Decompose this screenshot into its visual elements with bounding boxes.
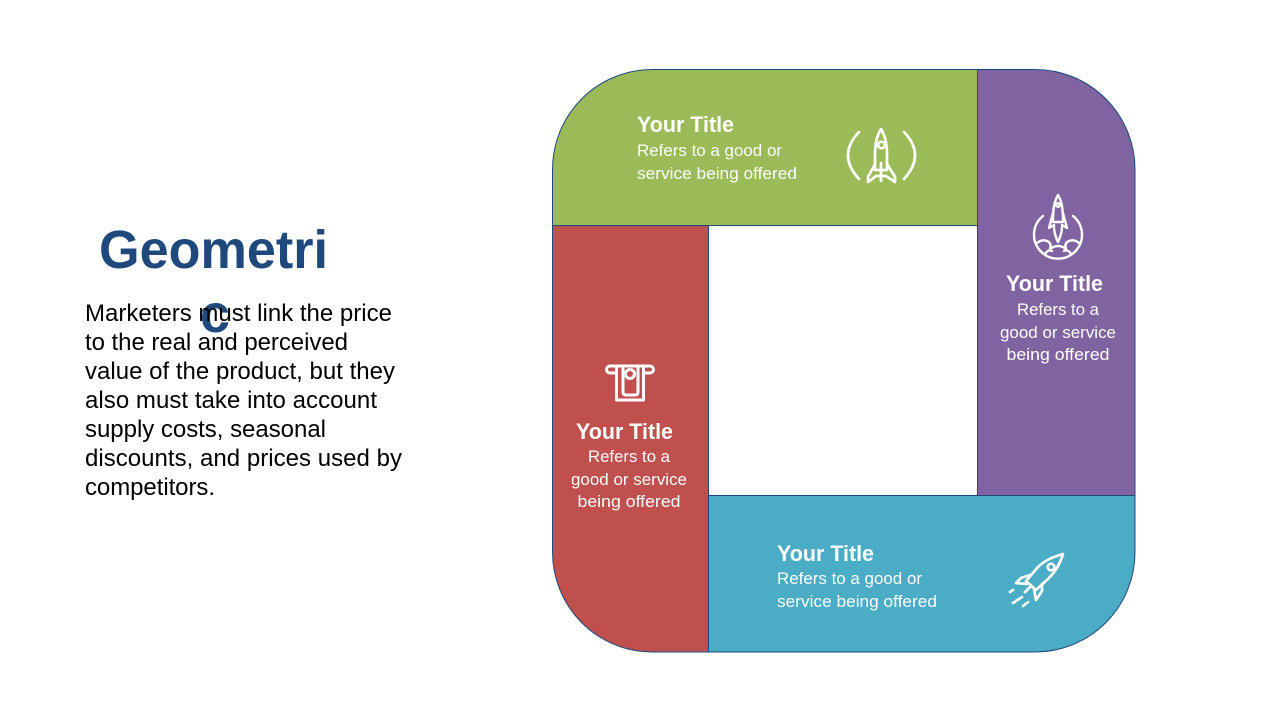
purple description bbox=[1000, 300, 1116, 364]
green heading: Your Title bbox=[637, 112, 734, 137]
purple description: Refers to a bbox=[1017, 300, 1100, 319]
icon: rocket launch with smoke circle bbox=[1034, 195, 1082, 259]
panel: teal bottom bbox=[708, 496, 1135, 652]
teal description bbox=[777, 569, 937, 611]
body text block: supply costs, seasonal bbox=[85, 416, 326, 443]
purple heading: Your Title bbox=[1006, 271, 1103, 296]
icon: diagonal rocket bbox=[1010, 554, 1063, 606]
icon: rocket with brackets bbox=[848, 129, 915, 182]
title bbox=[99, 220, 328, 344]
purple description: being offered bbox=[1006, 345, 1110, 364]
green description: service being offered bbox=[637, 164, 797, 183]
panel: red left bbox=[552, 226, 708, 652]
red description: good or service bbox=[571, 470, 687, 489]
body text block: competitors. bbox=[85, 474, 215, 501]
red description: Refers to a bbox=[588, 447, 671, 466]
body text block: Marketers must link the price bbox=[85, 300, 392, 327]
body text block: to the real and perceived bbox=[85, 329, 348, 356]
green description: Refers to a good or bbox=[637, 141, 782, 160]
panel: green top bbox=[552, 70, 978, 226]
red description bbox=[571, 447, 687, 511]
green description bbox=[637, 141, 797, 183]
title: Geometri bbox=[99, 220, 328, 280]
teal description: service being offered bbox=[777, 592, 937, 611]
body text block bbox=[85, 300, 402, 501]
body text block: value of the product, but they bbox=[85, 358, 395, 385]
icon: cash dispenser bbox=[606, 366, 654, 400]
panel: purple right bbox=[978, 70, 1135, 496]
body text block: discounts, and prices used by bbox=[85, 445, 402, 472]
purple description: good or service bbox=[1000, 323, 1116, 342]
red heading: Your Title bbox=[576, 419, 673, 444]
red description: being offered bbox=[578, 492, 680, 511]
body text block: also must take into account bbox=[85, 387, 377, 414]
teal heading: Your Title bbox=[777, 541, 874, 566]
title: c bbox=[200, 284, 230, 344]
teal description: Refers to a good or bbox=[777, 569, 922, 588]
